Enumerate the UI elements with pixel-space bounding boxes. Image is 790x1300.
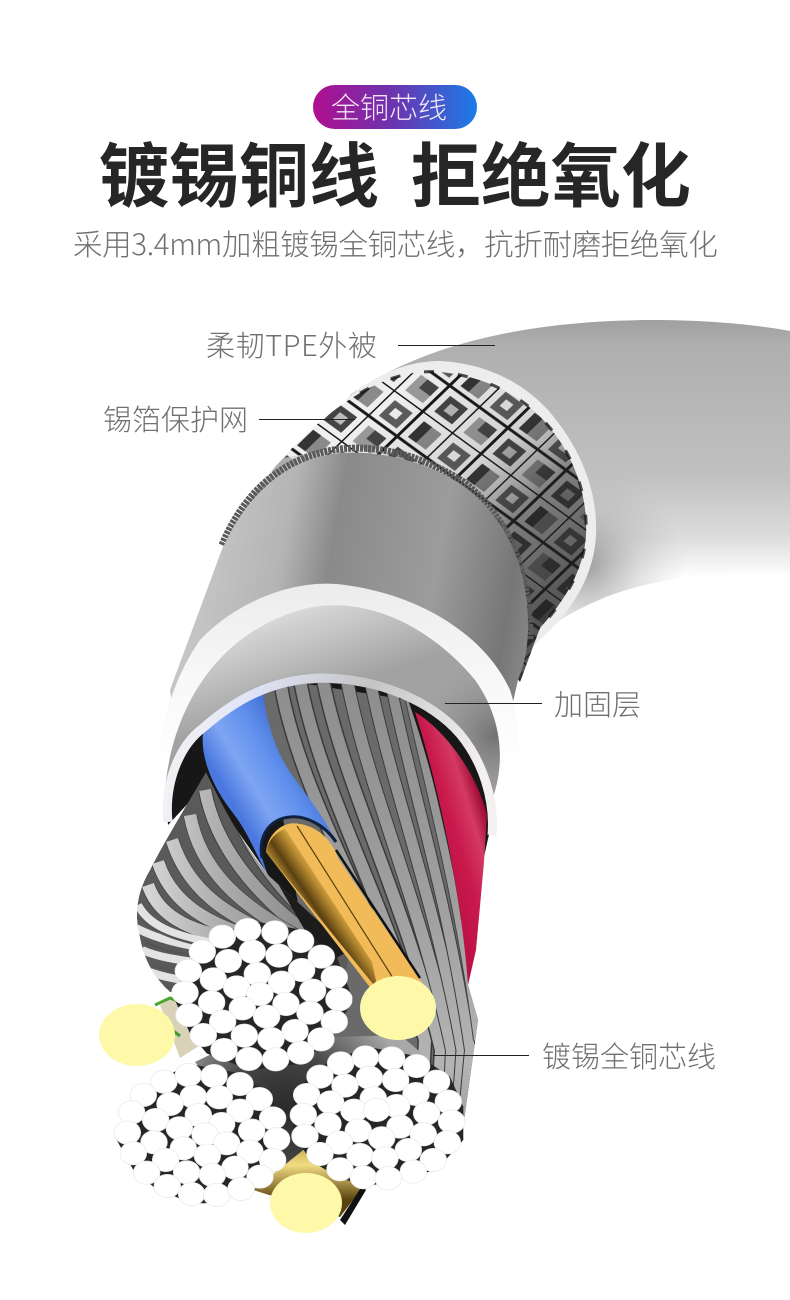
silver strands left fan [136,770,350,1000]
gold wire lower [253,1147,363,1217]
label: reinforcement layer: 加固层 [554,682,641,724]
leader line: TPE jacket [398,344,495,346]
label: tinned copper strands: 镀锡全铜芯线 [542,1034,716,1076]
reinforcement layer [155,584,518,860]
third conductor fragment [155,998,208,1058]
leader line: copper strands [433,1054,529,1056]
frayed braid edge [222,448,530,640]
aluminium foil shield [170,453,528,760]
cable interior shadow [167,683,490,920]
title: 镀锡铜线 拒绝氧化 [99,121,691,222]
opening rim [167,678,492,835]
tin foil braided mesh [218,372,586,682]
gold copper conductor [266,823,427,990]
blue wire [203,693,336,873]
badge pill [313,85,477,129]
subtitle: 采用3.4mm加粗镀锡全铜芯线，抗折耐磨拒绝氧化 [73,222,717,264]
cable cross-section illustration [99,320,790,1233]
label: TPE jacket: 柔韧TPE外被 [206,323,378,365]
strand bundles dark core [117,920,463,1203]
silver strands right bundle [263,683,478,1118]
gold wire lower shadow [340,1186,366,1225]
badge text: 全铜芯线 [331,85,447,127]
leader line: reinforcement [445,702,542,704]
central strand fan [195,1035,430,1180]
jacket opening white rim [345,361,596,648]
conductor end caps [99,976,436,1233]
label: foil mesh: 锡箔保护网 [103,397,248,439]
tinned copper white strands [114,918,465,1207]
outer TPE jacket [350,320,790,645]
red wire [415,712,487,985]
leader line: foil mesh [259,418,355,420]
